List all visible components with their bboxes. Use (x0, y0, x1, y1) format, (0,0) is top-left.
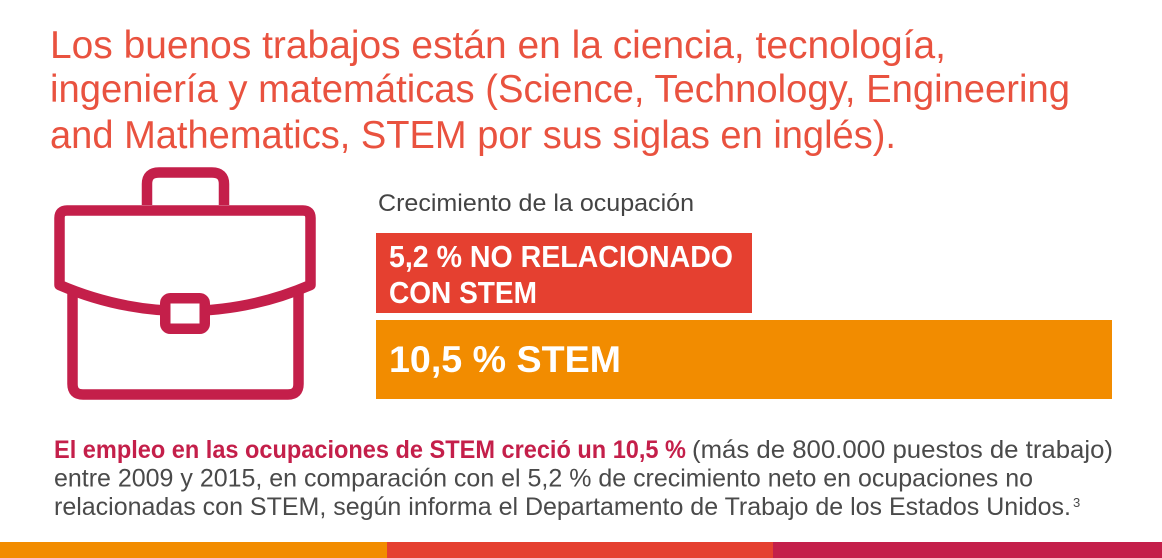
bar: non-STEM 5.2%: CON STEM (389, 275, 537, 310)
body text: relacionadas con STEM, según informa el Departamento de Trabajo de los Estados Unidos. (54, 493, 1071, 521)
title: Los buenos trabajos están en la ciencia, tecnología, (50, 24, 946, 67)
title (50, 24, 1070, 157)
icon: briefcase (60, 172, 310, 394)
bar: non-STEM 5.2% (376, 233, 752, 313)
body text: 3 (1073, 495, 1080, 510)
body text (54, 436, 1113, 521)
title: ingeniería y matemáticas (Science, Technology, Engineering (50, 68, 1070, 111)
title: and Mathematics, STEM por sus siglas en inglés). (50, 114, 896, 157)
body text: El empleo en las ocupaciones de STEM creció un 10,5 % (54, 436, 686, 464)
footer colour band (0, 542, 1162, 558)
bar: non-STEM 5.2%: 5,2 % NO RELACIONADO (389, 239, 733, 274)
bar: STEM 10.5%: 10,5 % STEM (389, 339, 621, 380)
chart heading: Crecimiento de la ocupación (378, 190, 694, 217)
body text: entre 2009 y 2015, en comparación con el 5,2 % de crecimiento neto en ocupaciones no (54, 464, 1033, 492)
body text: (más de 800.000 puestos de trabajo) (692, 436, 1113, 464)
bar: STEM 10.5% (376, 320, 1112, 399)
